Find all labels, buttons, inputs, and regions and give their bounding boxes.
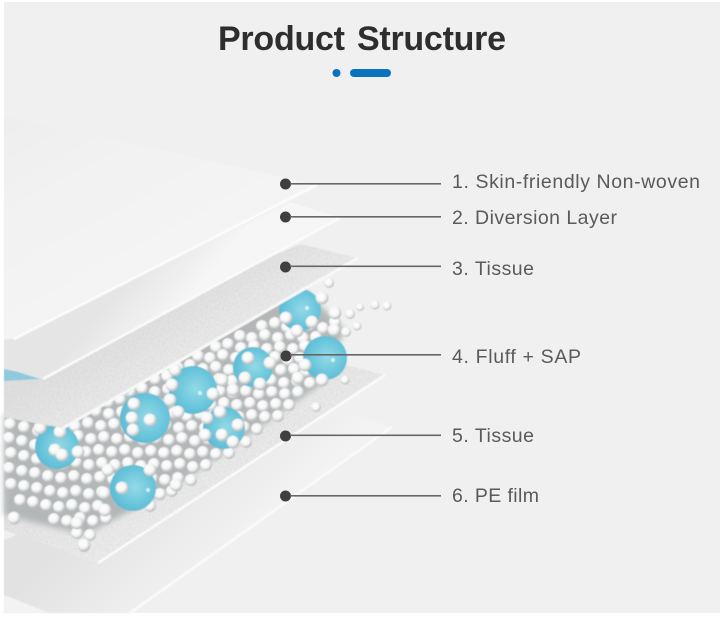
callout 6 [280, 485, 539, 507]
layer 5: tissue [4, 365, 385, 563]
callout 5: 5. Tissue [452, 425, 534, 447]
SAP blue beads [35, 289, 347, 511]
callout 1 [280, 171, 700, 193]
title accent: dot and bar [332, 69, 391, 77]
callout 4 [280, 346, 581, 368]
fluff beads in front [8, 278, 391, 551]
cyan absorbent patch [92, 366, 160, 396]
callout 2: 2. Diversion Layer [452, 207, 618, 229]
callout 1: 1. Skin-friendly Non-woven [452, 171, 700, 193]
title: Product [218, 20, 345, 58]
layer 3: tissue [4, 244, 358, 428]
illustration: exploded product layers [3, 117, 392, 613]
layer 4: fluff and SAP beads [3, 278, 392, 552]
callout 6: 6. PE film [452, 485, 539, 507]
layer 6: PE film [4, 412, 392, 613]
callout 3 [280, 258, 534, 280]
callout 5 [280, 425, 534, 447]
fluff beads behind [3, 316, 341, 552]
layer 2: diversion layer [4, 202, 340, 381]
callout 4: 4. Fluff + SAP [452, 346, 581, 368]
callout 2 [280, 207, 618, 229]
bead highlights [146, 306, 335, 492]
layer 1: skin-friendly non-woven [4, 117, 317, 339]
callout 3: 3. Tissue [452, 258, 534, 280]
title: Structure [357, 20, 506, 58]
